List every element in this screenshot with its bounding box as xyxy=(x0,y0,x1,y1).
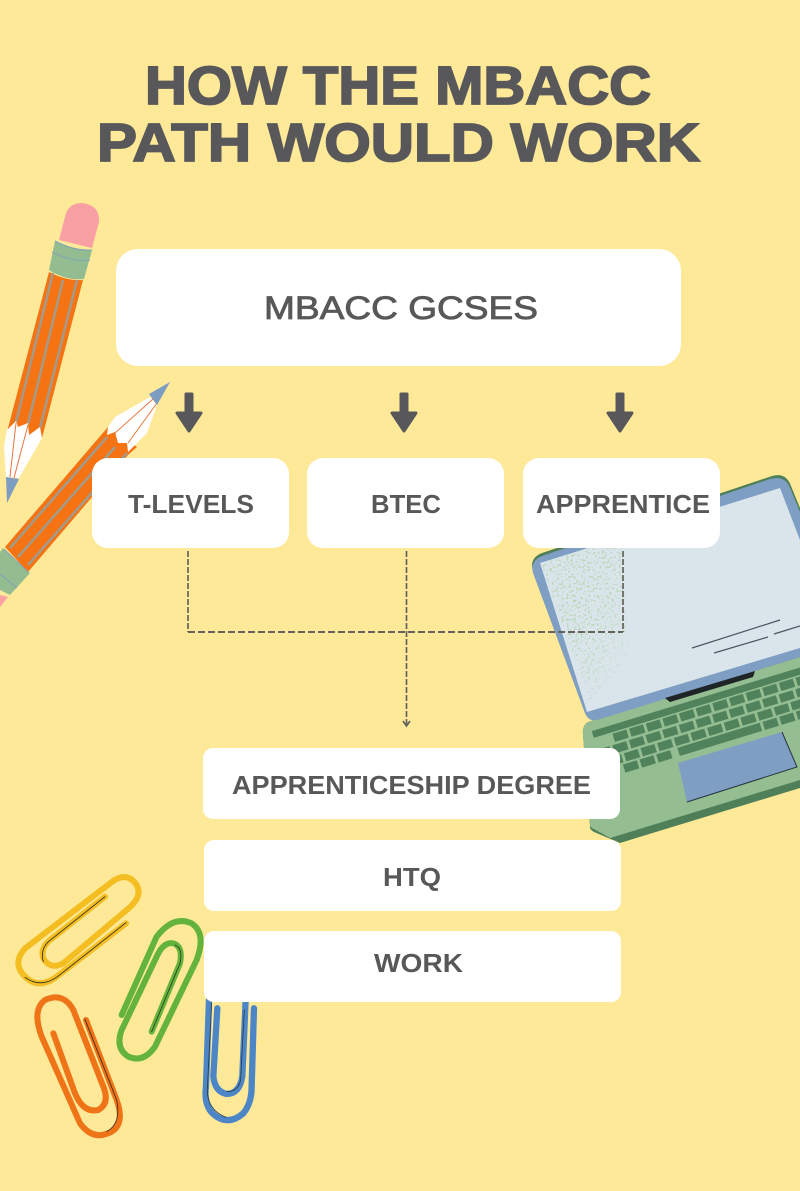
card: HTQ: HTQ xyxy=(383,862,441,892)
icon: slanted pencil xyxy=(0,382,170,607)
paperclip: yellow xyxy=(18,877,139,983)
paperclips xyxy=(18,877,254,1135)
hinge xyxy=(665,671,755,702)
title: HOW THE MBACC xyxy=(145,56,651,116)
card: HTQ xyxy=(204,840,621,911)
card: Apprentice: APPRENTICE xyxy=(536,489,710,519)
dashed connector xyxy=(188,551,623,726)
card: T-Levels: T-LEVELS xyxy=(128,489,254,519)
card: Apprenticeship Degree xyxy=(203,748,620,819)
title: PATH WOULD WORK xyxy=(97,113,700,173)
card: Work xyxy=(204,931,621,1002)
arrow: to BTEC xyxy=(392,394,416,431)
card: BTEC xyxy=(307,458,504,548)
card: MBACC GCSES: MBACC GCSES xyxy=(264,290,538,326)
paperclip: orange xyxy=(37,997,120,1135)
card: BTEC: BTEC xyxy=(371,489,441,519)
title xyxy=(97,56,700,173)
icon: upright pencil xyxy=(4,203,99,503)
paperclip: green xyxy=(119,921,201,1059)
laptop base xyxy=(583,657,800,843)
screen lines xyxy=(692,620,800,653)
keyboard xyxy=(591,664,800,775)
card: MBACC GCSES xyxy=(116,249,681,366)
card: Apprenticeship Degree: APPRENTICESHIP DEGREE xyxy=(232,770,591,800)
speckled screen texture xyxy=(541,538,630,700)
trackpad xyxy=(678,732,797,802)
card: Work: WORK xyxy=(374,948,463,978)
laptop screen xyxy=(532,475,800,720)
paperclip: blue xyxy=(206,1000,254,1120)
icon: laptop xyxy=(532,475,800,843)
card: Apprentice xyxy=(523,458,720,548)
card: T-Levels xyxy=(92,458,289,548)
arrow: to T-Levels xyxy=(177,394,201,431)
arrow: to Apprentice xyxy=(608,394,632,431)
